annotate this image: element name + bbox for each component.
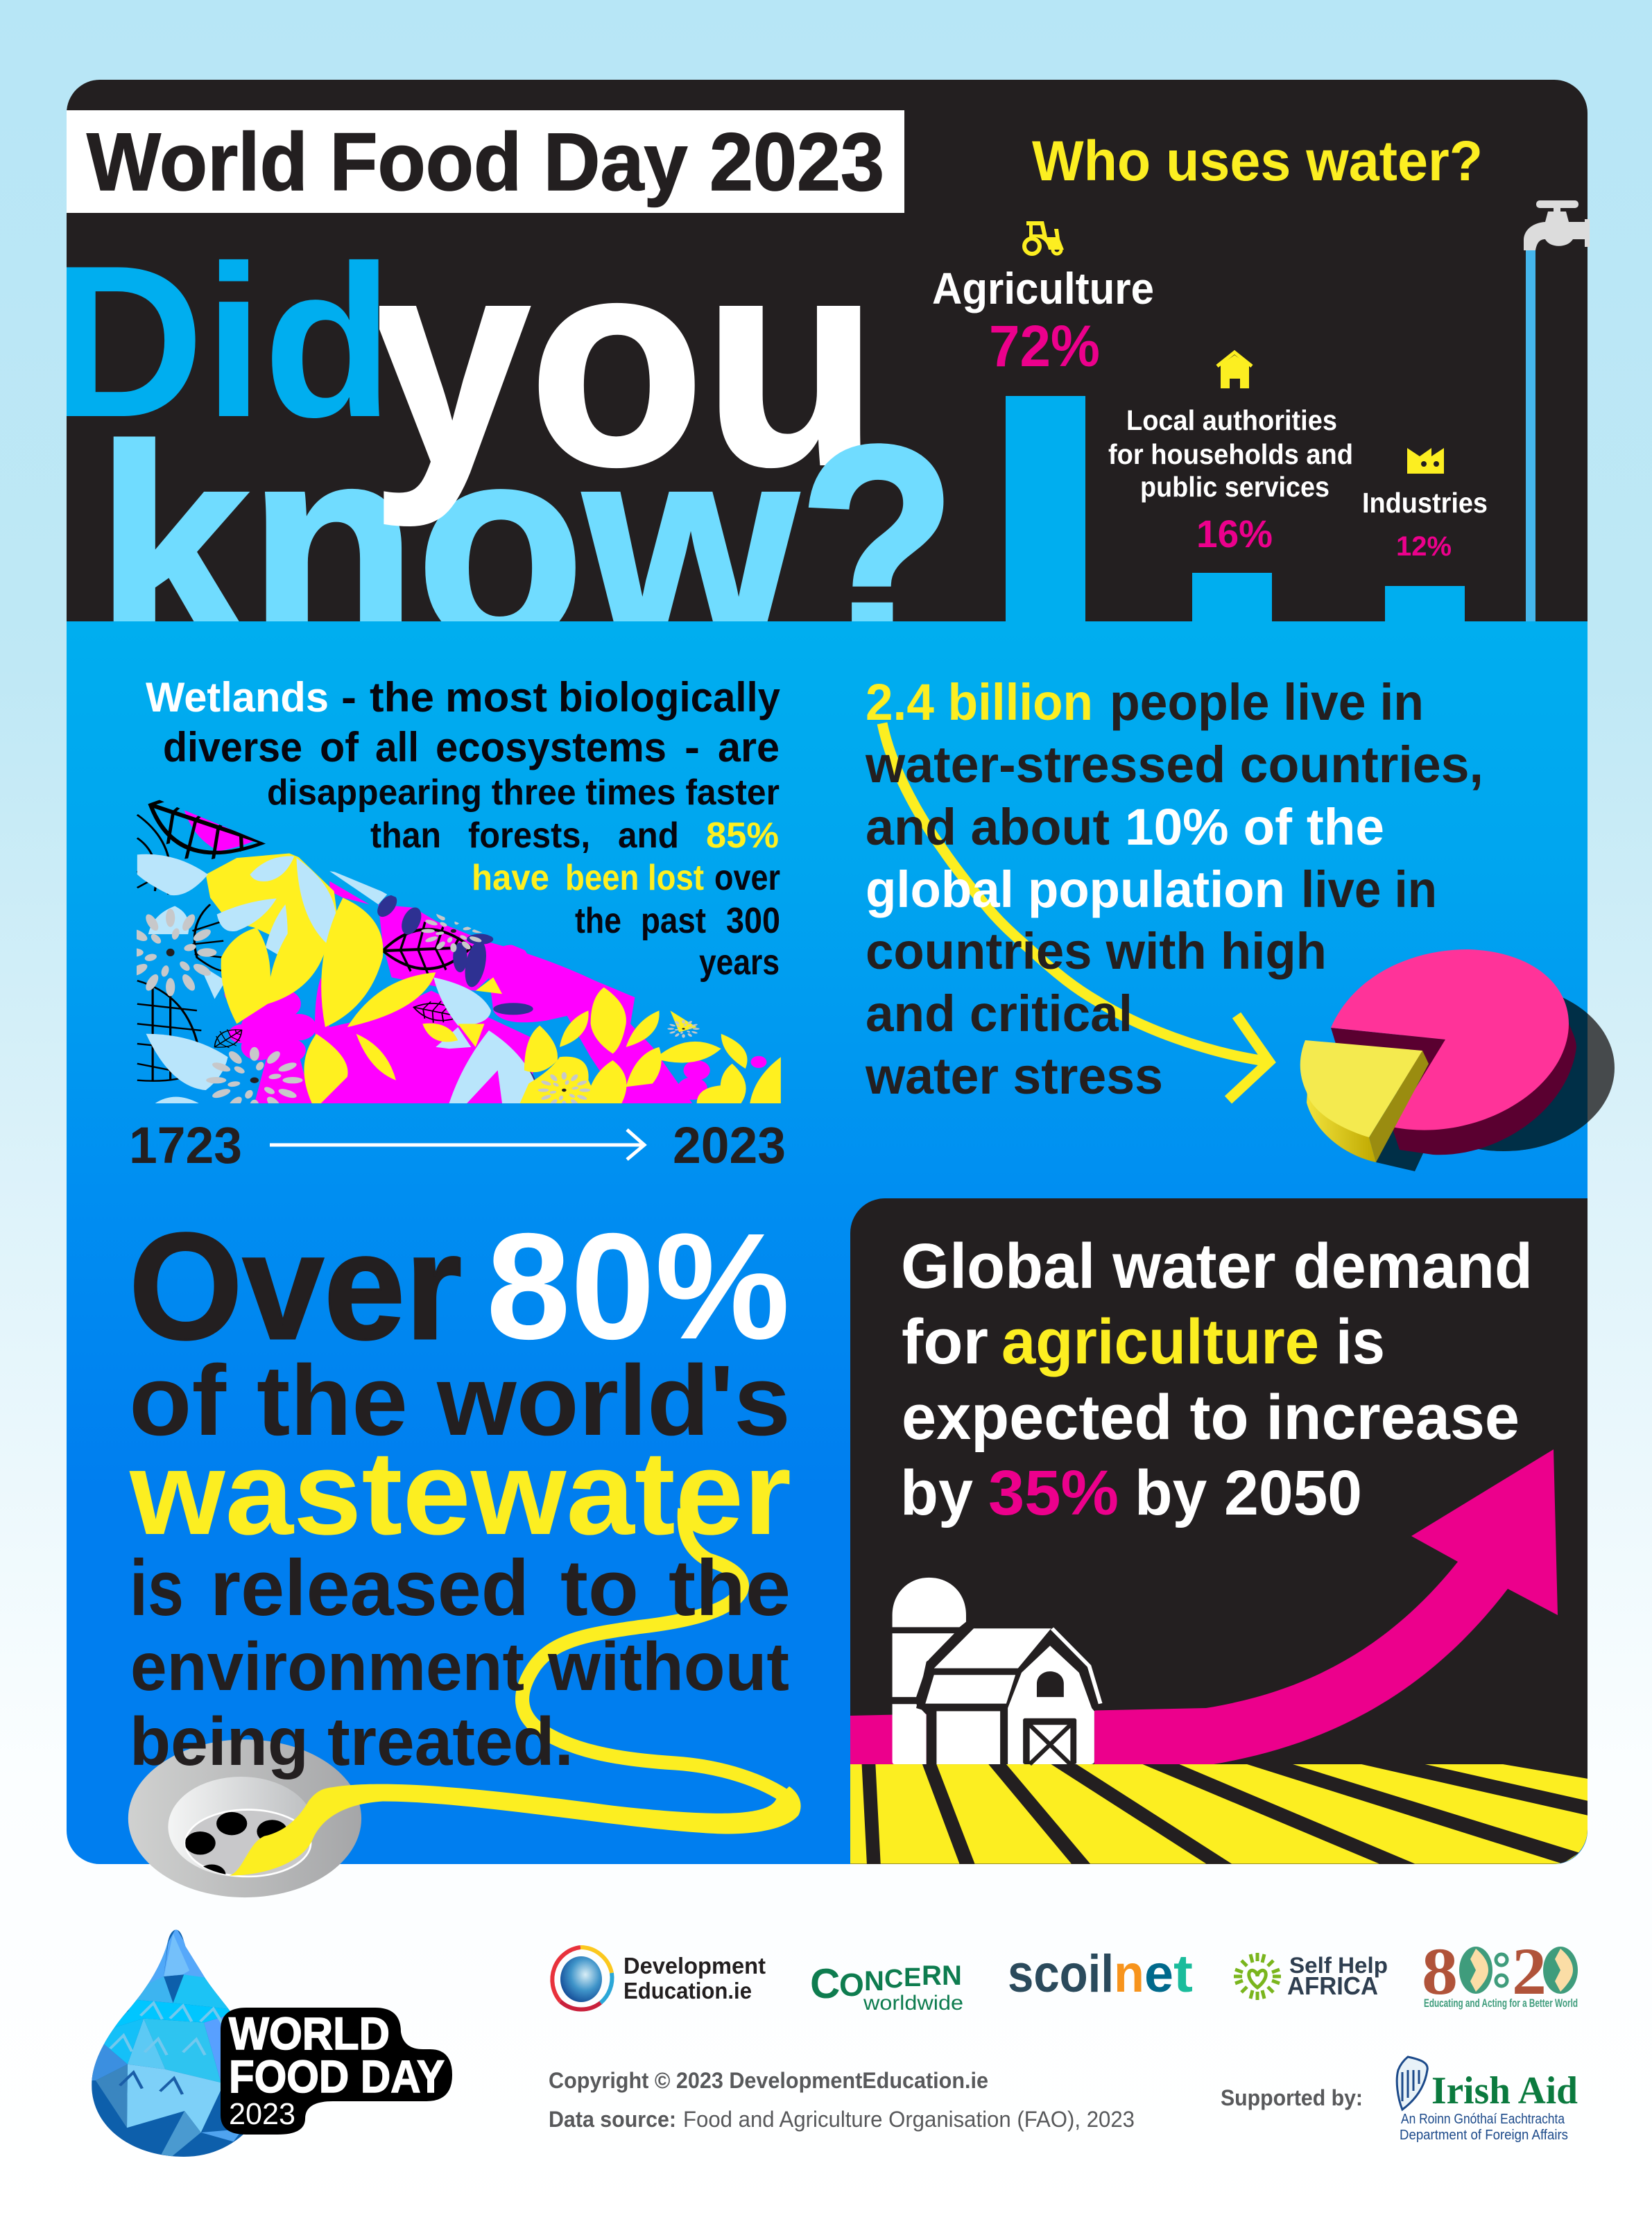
field bbox=[850, 1764, 1588, 1864]
logo: 80:20: Educating and Acting for a Better World bbox=[1424, 1997, 1578, 2010]
logo: concern worldwide: N bbox=[942, 1960, 962, 1991]
panel: water demand bbox=[850, 1198, 1588, 1864]
local authorities label: Local authorities bbox=[1126, 404, 1337, 436]
logo: concern worldwide: worldwide bbox=[863, 1992, 963, 2015]
water demand text: by bbox=[900, 1458, 973, 1528]
gray flowers bbox=[137, 908, 216, 997]
wastewater text: of bbox=[129, 1345, 227, 1456]
logo: irish aid: An Roinn Gnóthaí Eachtrachta bbox=[1401, 2112, 1565, 2127]
agriculture label: Agriculture bbox=[932, 264, 1154, 313]
heading: did you know: you bbox=[371, 197, 878, 528]
wetlands text: disappearing three times faster bbox=[267, 773, 780, 813]
pie chart bbox=[1300, 949, 1615, 1171]
logo: concern worldwide: R bbox=[922, 1960, 942, 1991]
wetlands text: been lost bbox=[565, 858, 704, 898]
heading: who uses water: Who uses water? bbox=[1032, 130, 1483, 193]
water stress text: 10% of the bbox=[1125, 798, 1384, 856]
navy foliage bbox=[360, 886, 539, 1107]
logo: scoilnet: scoil bbox=[1008, 1945, 1114, 2003]
wetlands text: Wetlands bbox=[146, 674, 329, 721]
main card bbox=[67, 80, 1588, 1864]
water demand text: expected to increase bbox=[902, 1382, 1520, 1453]
wetlands text: the bbox=[575, 901, 621, 941]
logo: scoilnet bbox=[1008, 1945, 1193, 2003]
wetlands text: past bbox=[641, 901, 706, 941]
wastewater text: world's bbox=[436, 1345, 791, 1456]
water demand text: is bbox=[1336, 1307, 1385, 1377]
wetlands text: diverse bbox=[163, 724, 302, 770]
wetlands text: biologically bbox=[558, 674, 781, 721]
local authorities label: for households and bbox=[1108, 438, 1353, 470]
copyright text bbox=[549, 2068, 1135, 2132]
wetlands text: and bbox=[618, 816, 679, 856]
wastewater text: is bbox=[130, 1544, 184, 1632]
water demand text: Global water demand bbox=[901, 1231, 1533, 1302]
wetlands text: forests, bbox=[468, 816, 590, 856]
local authorities label bbox=[1108, 404, 1353, 503]
icon: factory bbox=[1407, 448, 1444, 474]
badge text: FOOD DAY bbox=[229, 2051, 445, 2102]
drain bbox=[128, 1739, 801, 1897]
water demand text: by 2050 bbox=[1135, 1458, 1362, 1528]
local authorities percent: 16% bbox=[1196, 512, 1273, 555]
wetlands text: have bbox=[472, 858, 549, 898]
wetlands text: are bbox=[718, 724, 780, 770]
badge text: WORLD bbox=[229, 2008, 390, 2059]
wastewater text: environment bbox=[130, 1628, 524, 1705]
logo: scoilnet: n bbox=[1114, 1945, 1144, 2003]
wastewater text: treated. bbox=[327, 1703, 574, 1779]
wetlands text: - bbox=[341, 674, 356, 721]
water stress text: live in bbox=[1301, 861, 1437, 918]
logo: concern worldwide: C bbox=[884, 1965, 903, 1994]
wastewater text: Over bbox=[129, 1202, 462, 1371]
heading: did you know: know bbox=[96, 388, 798, 702]
badge text: 2023 bbox=[229, 2097, 295, 2131]
wetlands text: - bbox=[685, 724, 700, 770]
logo: concern worldwide: C bbox=[810, 1960, 840, 2007]
back yellow foliage bbox=[206, 853, 338, 951]
logo: concern worldwide: E bbox=[904, 1963, 921, 1992]
wetlands text: ecosystems bbox=[436, 724, 666, 770]
water demand text: for bbox=[902, 1307, 988, 1377]
wastewater text bbox=[129, 1202, 791, 1779]
logo: 80:20: 2 bbox=[1512, 1934, 1547, 2008]
arrow: yellow curve bbox=[882, 723, 1270, 1100]
yellow foliage bbox=[221, 898, 781, 1103]
logo: scoilnet: t bbox=[1173, 1945, 1193, 2003]
bar: local authorities bbox=[1192, 573, 1272, 621]
wetlands text: 85% bbox=[706, 816, 779, 856]
heading: did you know: ? bbox=[800, 388, 956, 702]
heading: did you know bbox=[67, 259, 943, 621]
logo: irish aid: Irish Aid bbox=[1431, 2069, 1578, 2112]
logo: self help africa: AFRICA bbox=[1287, 1972, 1378, 2000]
water demand text: 35% bbox=[988, 1458, 1119, 1528]
logo: development education: Education.ie bbox=[623, 1978, 752, 2003]
water demand text: agriculture bbox=[1001, 1307, 1319, 1377]
agriculture percent: 72% bbox=[989, 313, 1100, 379]
water stress text: people live in bbox=[1110, 673, 1424, 731]
magenta foliage bbox=[184, 808, 766, 1103]
bar: industries bbox=[1385, 586, 1465, 621]
water stress text bbox=[865, 673, 1483, 1105]
logo: concern worldwide bbox=[810, 1960, 963, 2015]
title banner: World Food Day 2023 bbox=[87, 117, 884, 208]
wastewater text: without bbox=[547, 1628, 789, 1705]
water stress text: and critical bbox=[866, 985, 1133, 1042]
local authorities label: public services bbox=[1140, 471, 1330, 503]
logo: concern worldwide: O bbox=[839, 1967, 864, 2003]
panel: who uses water bbox=[932, 130, 1590, 621]
logo: 80:20: 8 bbox=[1422, 1934, 1458, 2008]
yellow wastewater stream bbox=[522, 1508, 789, 1799]
logo: development education bbox=[552, 1947, 766, 2010]
arrow: pink rising bbox=[850, 1449, 1558, 1764]
water stream bbox=[1526, 250, 1535, 621]
industries percent: 12% bbox=[1396, 531, 1452, 562]
bar: agriculture bbox=[1006, 396, 1085, 621]
wastewater text: to bbox=[560, 1544, 639, 1632]
logo: self help africa: Self Help bbox=[1289, 1953, 1388, 1978]
wastewater text: being bbox=[130, 1703, 309, 1779]
water stress text: global population bbox=[866, 861, 1285, 918]
wastewater text: the bbox=[257, 1345, 408, 1456]
wetlands text: all bbox=[375, 724, 419, 770]
wetlands text: the bbox=[370, 674, 434, 721]
wastewater text: wastewater bbox=[129, 1426, 791, 1560]
wetlands text: most bbox=[445, 674, 547, 721]
water stress text: 2.4 billion bbox=[866, 673, 1093, 731]
wastewater text: 80% bbox=[486, 1202, 790, 1371]
wetlands text: of bbox=[320, 724, 359, 770]
wastewater text: released bbox=[210, 1544, 529, 1632]
wastewater text: the bbox=[669, 1544, 791, 1632]
badge bbox=[221, 2008, 452, 2135]
water stress text: water-stressed countries, bbox=[865, 736, 1483, 793]
industries label: Industries bbox=[1362, 487, 1488, 519]
barn bbox=[893, 1578, 1101, 1764]
logo: irish aid: Department of Foreign Affairs bbox=[1400, 2128, 1568, 2143]
light blue foliage bbox=[137, 854, 535, 1103]
icon: water drop bbox=[92, 1929, 243, 2157]
logo: irish aid bbox=[1397, 2057, 1578, 2143]
supported by text: Supported by: bbox=[1221, 2085, 1363, 2110]
wetlands text: over bbox=[714, 858, 780, 898]
icon: tap bbox=[1524, 200, 1590, 250]
wetlands text bbox=[146, 674, 781, 983]
water stress text: and about bbox=[866, 798, 1110, 856]
water stress text: water stress bbox=[865, 1047, 1163, 1105]
water stress text: countries with high bbox=[866, 922, 1327, 980]
logo: concern worldwide: N bbox=[864, 1966, 884, 1997]
copyright text: Copyright © 2023 DevelopmentEducation.ie bbox=[549, 2068, 988, 2093]
wetlands text: 300 bbox=[726, 901, 780, 941]
logo: 80:20 bbox=[1422, 1934, 1578, 2010]
copyright text: Food and Agriculture Organisation (FAO), 2023 bbox=[683, 2107, 1135, 2132]
panel: water stress bbox=[865, 673, 1615, 1171]
timeline bbox=[129, 1117, 786, 1174]
timeline: 2023 bbox=[673, 1117, 786, 1174]
copyright text: Data source: bbox=[549, 2107, 676, 2132]
panel: wetlands bbox=[124, 674, 786, 1174]
timeline: 1723 bbox=[129, 1117, 242, 1174]
logo: world food day bbox=[88, 1928, 452, 2159]
icon: house bbox=[1217, 352, 1252, 388]
logo: development education: Development bbox=[623, 1953, 766, 1979]
logo: self help africa bbox=[1234, 1953, 1388, 2000]
logo: scoilnet: e bbox=[1144, 1945, 1173, 2003]
icon: tractor bbox=[1024, 221, 1064, 254]
panel: wastewater bbox=[128, 1202, 801, 1897]
water demand text bbox=[900, 1231, 1533, 1528]
heading: did you know: Did bbox=[51, 221, 393, 463]
wetlands text: than bbox=[370, 816, 441, 856]
floral triangle bbox=[124, 770, 781, 1114]
wetlands text: years bbox=[699, 942, 780, 983]
badge text bbox=[229, 2008, 445, 2131]
